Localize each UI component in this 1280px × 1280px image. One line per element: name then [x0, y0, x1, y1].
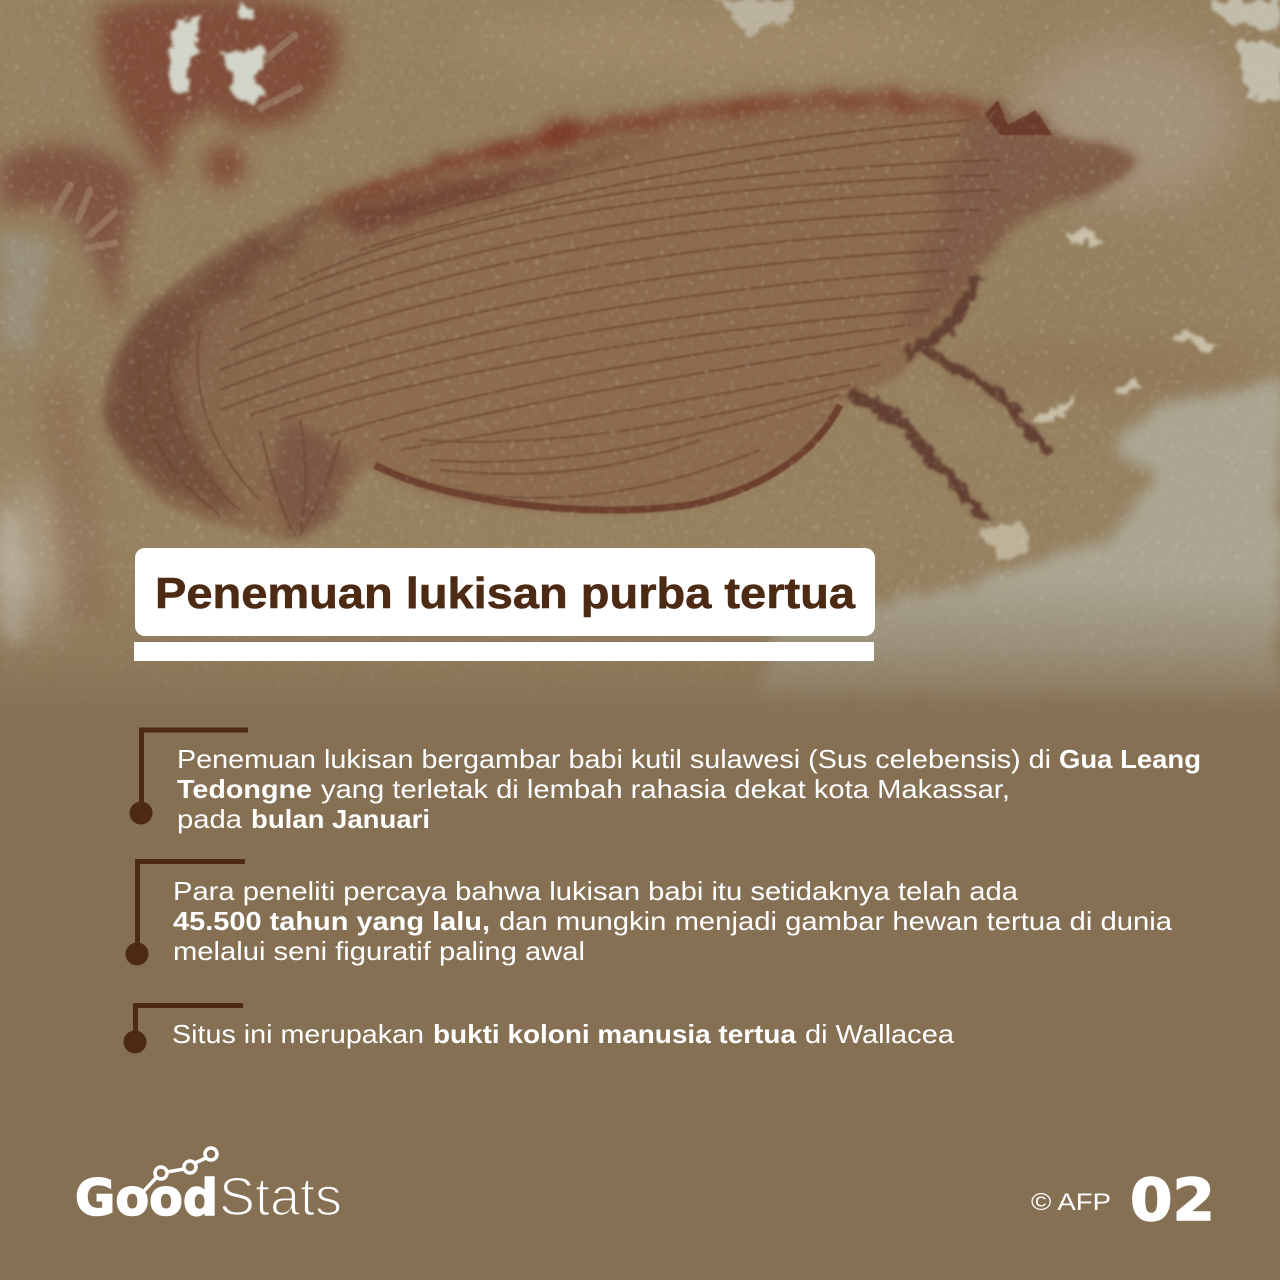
paragraph 1: Penemuan lukisan bergambar babi kutil sulawesi (Sus celebensis) di	[177, 744, 1051, 774]
heading box: Penemuan lukisan purba tertua	[155, 569, 856, 618]
background: cave wall photograph	[0, 0, 1280, 720]
text block 1	[130, 730, 1201, 834]
paragraph 1: yang terletak di lembah rahasia dekat kota Makassar,	[321, 774, 1010, 804]
solid bottom area	[0, 718, 1280, 1280]
credit: AFP: © AFP	[1031, 1189, 1111, 1216]
pale lower-right rock	[760, 385, 1280, 700]
white flakes top	[168, 5, 268, 102]
belly line	[375, 405, 840, 510]
logo: GoodStats: Stats	[219, 1167, 342, 1227]
bracket 2	[126, 862, 245, 966]
paragraph 1	[177, 744, 1201, 834]
dark shoulder band	[320, 140, 660, 235]
paragraph 2	[173, 876, 1173, 966]
bracket 3	[124, 1006, 243, 1054]
rock specks	[0, 0, 1280, 720]
paragraph 3: di Wallacea	[805, 1019, 955, 1049]
paragraph 2: melalui seni figuratif paling awal	[173, 936, 585, 966]
paragraph 3: bukti koloni manusia tertua	[433, 1019, 797, 1049]
pig back outline	[330, 98, 985, 205]
mottled rock tone	[0, 0, 1280, 720]
paragraph 2: 45.500 tahun yang lalu,	[173, 906, 490, 936]
light rock patches	[0, 15, 1270, 640]
grey left wall	[0, 230, 50, 640]
heading underline bar	[134, 642, 874, 661]
paragraph 1: bulan Januari	[251, 804, 430, 834]
paragraph 3	[172, 1019, 955, 1049]
pig body	[104, 100, 1135, 540]
pig head darker	[900, 100, 1135, 330]
bottom fade	[0, 575, 1280, 720]
page number: 02	[1130, 1166, 1215, 1234]
fur strokes	[140, 120, 1000, 535]
logo: GoodStats	[75, 1148, 342, 1227]
hand fingers	[55, 35, 300, 248]
text block 3	[124, 1006, 955, 1054]
paragraph 1: Tedongne	[177, 774, 312, 804]
paragraph 1: Gua Leang	[1059, 744, 1201, 774]
heading box	[135, 548, 875, 636]
front legs	[850, 280, 1050, 520]
painting: warty pig	[104, 98, 1135, 540]
paragraph 3: Situs ini merupakan	[172, 1019, 424, 1049]
white crust marks right	[980, 225, 1215, 565]
rump shading	[108, 210, 330, 510]
paragraph 2: Para peneliti percaya bahwa lukisan babi itu setidaknya telah ada	[173, 876, 1019, 906]
bracket 1	[130, 730, 248, 824]
text block 2	[126, 862, 1173, 966]
paragraph 2: dan mungkin menjadi gambar hewan tertua di dunia	[499, 906, 1173, 936]
hind leg	[267, 420, 355, 540]
icon: trend line	[143, 1148, 217, 1192]
red hand stencils	[0, 0, 340, 620]
paragraph 1: pada	[177, 804, 243, 834]
logo: GoodStats: Good	[75, 1169, 218, 1227]
